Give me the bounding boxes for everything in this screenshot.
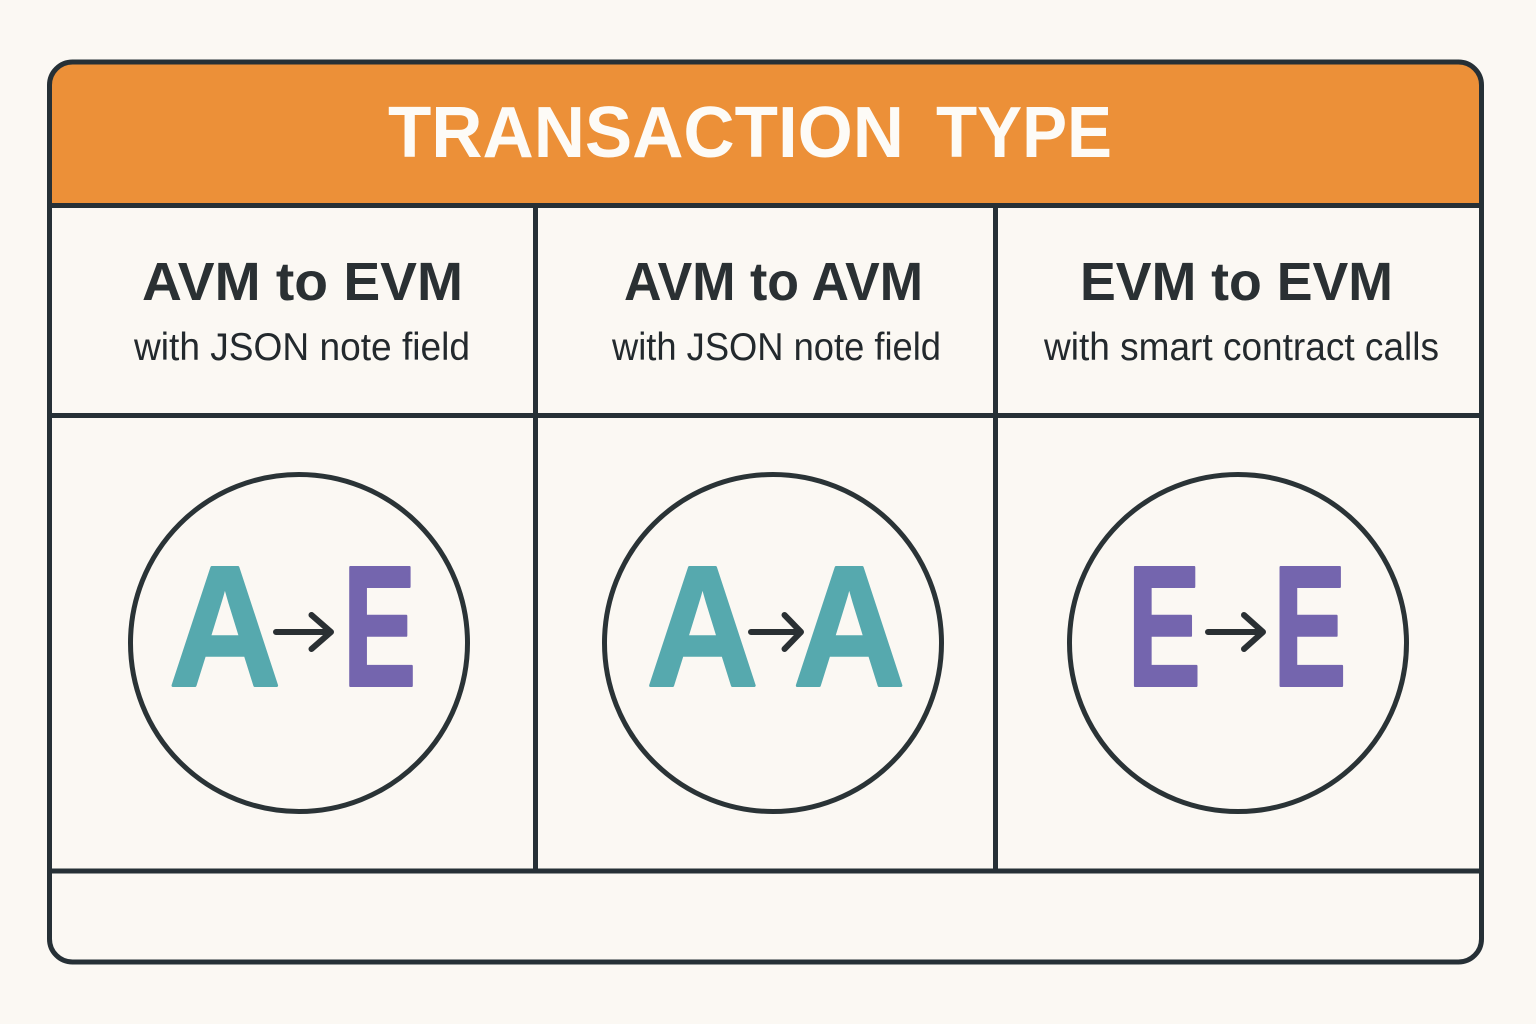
- icon: A to A: [604, 474, 942, 812]
- arrow: A to A: [751, 615, 801, 649]
- title banner: [50, 62, 1482, 205]
- icon: E to E: [1070, 474, 1406, 812]
- subheading: with smart contract calls: with smart contract calls: [1043, 326, 1439, 369]
- arrow: A to E: [276, 615, 331, 649]
- heading: AVM to AVM: AVM to AVM: [624, 252, 923, 312]
- icon: A to A: A: [647, 530, 758, 722]
- column: EVM to EVM: [1043, 252, 1439, 812]
- subheading: with JSON note field: with JSON note field: [611, 326, 941, 369]
- icon: A to A: A: [793, 530, 905, 722]
- icon: A to E: A: [169, 530, 281, 722]
- column: AVM to AVM: [604, 252, 942, 812]
- column: AVM to EVM: [130, 252, 470, 812]
- icon: A to E: [130, 474, 468, 812]
- icon: E to E: E: [1128, 531, 1201, 722]
- heading: AVM to EVM: AVM to EVM: [142, 252, 463, 312]
- icon: E to E: E: [1273, 531, 1346, 722]
- arrow: E to E: [1208, 615, 1263, 649]
- subheading: with JSON note field: with JSON note field: [133, 326, 470, 369]
- title: TYPE: [936, 93, 1112, 173]
- title: TRANSACTION: [388, 93, 904, 173]
- icon: A to E: E: [343, 531, 416, 722]
- heading: EVM to EVM: EVM to EVM: [1080, 252, 1393, 312]
